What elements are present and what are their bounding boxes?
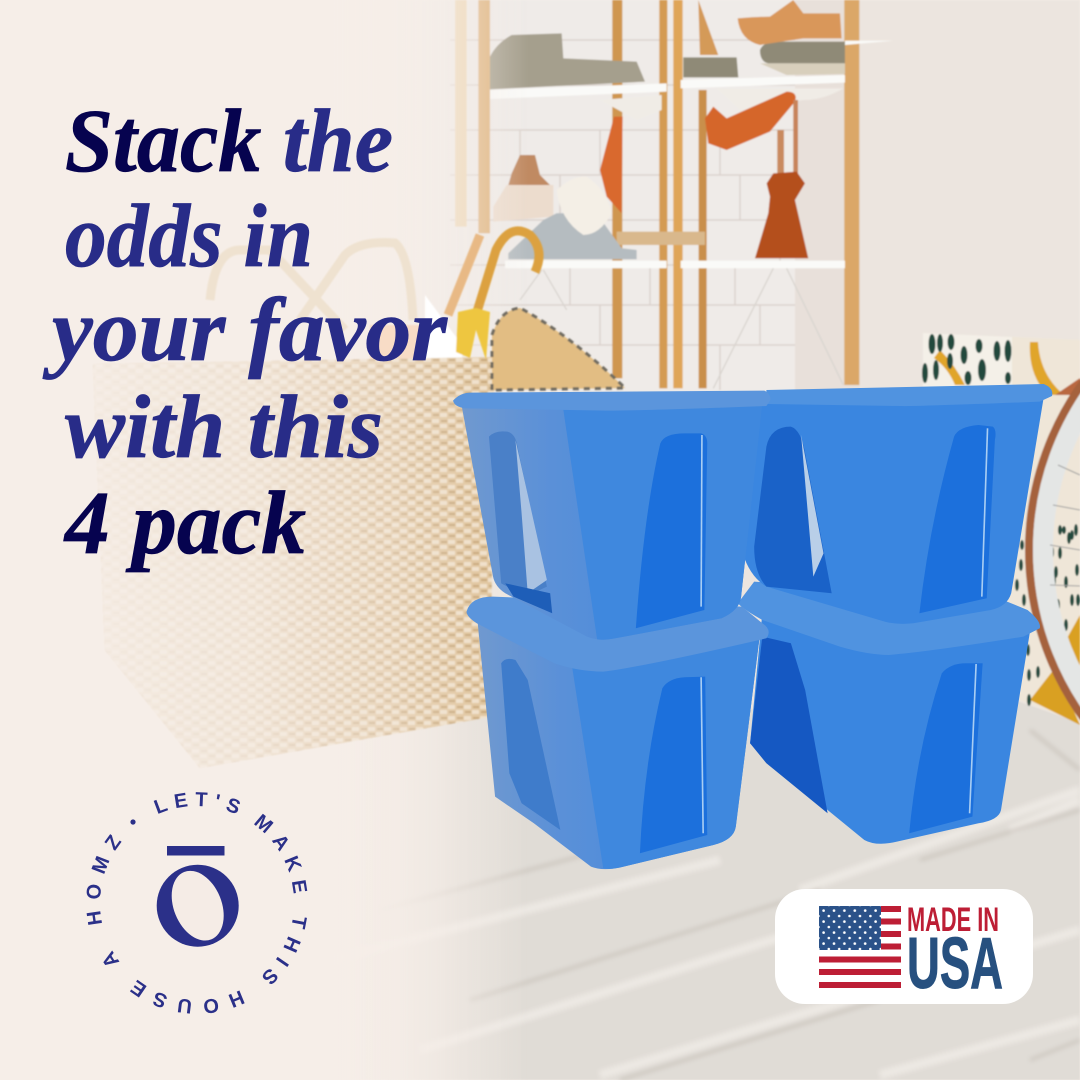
line: odds in: odds in xyxy=(65,187,313,286)
headline xyxy=(42,92,448,573)
umbrellas xyxy=(448,231,539,360)
white cloth corner xyxy=(425,295,462,362)
folded textiles xyxy=(490,33,645,89)
floor xyxy=(0,702,1080,1080)
usa text: USA xyxy=(907,924,1003,1004)
bin: bottom right xyxy=(738,582,1040,844)
made in text: MADE IN xyxy=(907,901,999,939)
bin: top left xyxy=(453,391,770,640)
terracotta vase xyxy=(755,172,808,258)
badge background xyxy=(775,889,1033,1004)
stack of four blue storage bins xyxy=(453,384,1052,869)
made in USA badge xyxy=(775,889,1033,1004)
thin stand wires xyxy=(520,268,843,388)
straw hat xyxy=(492,308,625,390)
bin: bottom left xyxy=(467,597,769,869)
orange hat xyxy=(600,117,623,213)
basket, umbrellas and hat group xyxy=(93,231,625,768)
basket handles xyxy=(210,242,413,330)
bamboo shelf with objects xyxy=(455,0,893,388)
brick wall xyxy=(300,0,795,400)
cloth in basket xyxy=(370,325,430,368)
circular slogan: LET'S MAKE THISHOUSEAHOMZ xyxy=(86,792,308,1014)
tan hat xyxy=(508,155,550,185)
orange shoe upper shelf xyxy=(705,92,796,150)
line: your favor: your favor xyxy=(42,281,448,380)
logo macron bar xyxy=(167,846,224,856)
logo letter o xyxy=(157,863,239,948)
grey iron base xyxy=(508,213,637,259)
slogan dot xyxy=(130,819,136,825)
bin: top right xyxy=(743,384,1052,624)
american flag xyxy=(819,906,901,988)
line: 4 pack: 4 pack xyxy=(63,474,306,573)
right wall xyxy=(795,0,1080,400)
round brand logo xyxy=(86,792,308,1014)
pale stacked objects xyxy=(493,185,553,222)
wall art canvas xyxy=(922,333,1080,725)
white shelves xyxy=(490,41,893,268)
white shoe xyxy=(557,176,612,235)
bicycle wheel xyxy=(1029,264,1080,836)
line: Stack the: Stack the xyxy=(65,92,393,191)
back wall xyxy=(0,0,1080,780)
wicker basket xyxy=(93,357,495,768)
bamboo posts xyxy=(455,0,859,388)
line: with this: with this xyxy=(65,378,383,477)
